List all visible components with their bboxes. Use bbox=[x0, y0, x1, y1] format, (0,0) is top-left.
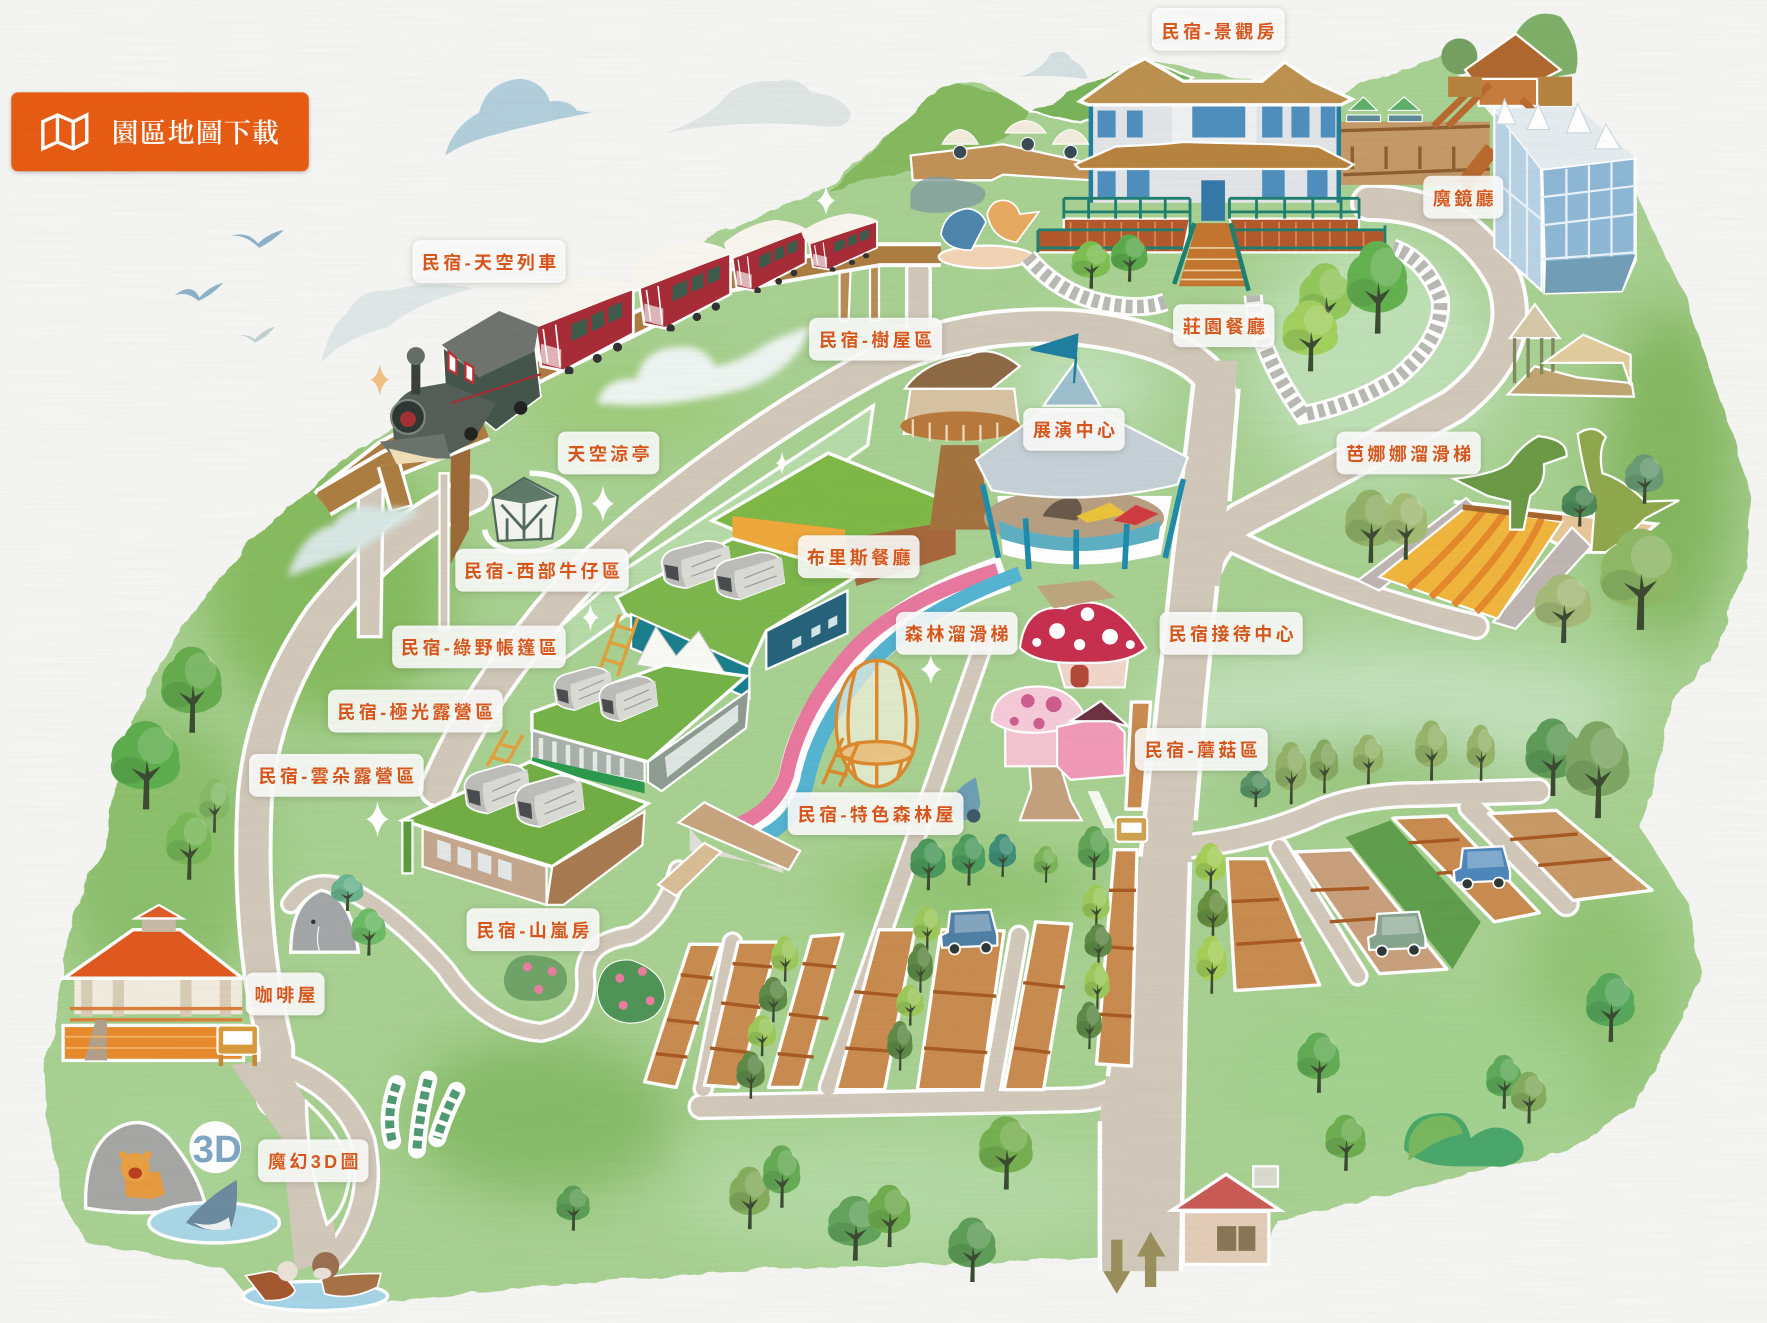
deck planks bbox=[1038, 219, 1385, 252]
label: 民宿-蘑菇區: 民宿-蘑菇區 bbox=[1145, 740, 1261, 761]
label: 咖啡屋: 咖啡屋 bbox=[255, 985, 319, 1005]
label: 民宿-西部牛仔區: 民宿-西部牛仔區 bbox=[464, 561, 623, 582]
label: 民宿-綠野帳篷區: 民宿-綠野帳篷區 bbox=[401, 637, 560, 658]
label: 民宿-樹屋區: 民宿-樹屋區 bbox=[819, 330, 935, 351]
sky pavilion bbox=[485, 473, 579, 552]
label: 民宿接待中心: 民宿接待中心 bbox=[1169, 624, 1297, 645]
label: 民宿-景觀房: 民宿-景觀房 bbox=[1162, 21, 1278, 42]
clouds in sky bbox=[321, 52, 1087, 363]
label: 咖啡屋 bbox=[246, 973, 325, 1015]
label: 森林溜滑梯 bbox=[896, 612, 1018, 655]
tiger bbox=[119, 1151, 165, 1199]
exhibition center bbox=[976, 335, 1188, 569]
bus stop sign bbox=[217, 1025, 258, 1055]
rose bushes bbox=[504, 955, 665, 1023]
label: 民宿-特色森林屋: 民宿-特色森林屋 bbox=[798, 804, 957, 825]
rock bushes bbox=[911, 177, 985, 213]
tent stage pavilion bbox=[1508, 304, 1634, 397]
label: 民宿-景觀房 bbox=[1152, 8, 1285, 51]
grass sliver in loop bbox=[307, 1102, 349, 1224]
scattered trees lower bbox=[556, 973, 1635, 1282]
gatehouse bbox=[1172, 1166, 1280, 1264]
pale road strip bbox=[530, 406, 873, 659]
main villa bbox=[911, 59, 1490, 291]
building: aurora camp bbox=[487, 665, 749, 793]
tents bbox=[637, 627, 727, 685]
farm fields right bbox=[1227, 810, 1652, 991]
farm vans bbox=[941, 846, 1510, 957]
rail-car cabins on rooftops bbox=[464, 541, 784, 827]
label: 民宿-雲朵露營區: 民宿-雲朵露營區 bbox=[258, 766, 418, 787]
label: 森林溜滑梯: 森林溜滑梯 bbox=[905, 625, 1012, 645]
label: 民宿-極光露營區: 民宿-極光露營區 bbox=[337, 701, 497, 722]
label: 民宿-天空列車: 民宿-天空列車 bbox=[422, 252, 560, 273]
railway bridge and pillars bbox=[321, 255, 941, 637]
label: 民宿-西部牛仔區 bbox=[455, 549, 629, 592]
train: locomotive bbox=[380, 311, 541, 464]
label: 民宿-天空列車 bbox=[412, 240, 566, 283]
treehouse area building bbox=[900, 351, 1020, 530]
climbing dome bbox=[823, 660, 917, 787]
main road white edges bbox=[1100, 383, 1238, 1271]
red mushroom reception bbox=[1020, 580, 1146, 687]
label: 魔鏡廳 bbox=[1423, 176, 1503, 219]
wooden terrace right behind bbox=[1341, 122, 1490, 185]
farm field furrows left bbox=[656, 890, 1136, 1057]
teal railings bbox=[1038, 198, 1385, 252]
label: 魔幻3D圖 bbox=[258, 1139, 369, 1182]
mandarin ducks bbox=[243, 1252, 388, 1311]
low clouds on map bbox=[287, 327, 811, 577]
label: 民宿-樹屋區 bbox=[809, 318, 942, 361]
download button bbox=[11, 92, 309, 171]
flying birds bbox=[175, 230, 284, 343]
building: Bliss restaurant bbox=[712, 453, 967, 586]
label: 魔幻3D圖: 魔幻3D圖 bbox=[268, 1151, 362, 1172]
label: 芭娜娜溜滑梯: 芭娜娜溜滑梯 bbox=[1346, 444, 1475, 464]
label: 天空涼亭: 天空涼亭 bbox=[567, 443, 653, 464]
main entry road bbox=[1100, 361, 1237, 1271]
label: 布里斯餐廳 bbox=[798, 535, 920, 578]
mirror glass hall bbox=[1494, 99, 1635, 293]
scooter bbox=[949, 778, 980, 823]
patio umbrellas bbox=[942, 97, 1422, 159]
label: 民宿-山嵐房: 民宿-山嵐房 bbox=[477, 920, 593, 941]
building: cloud camp bbox=[402, 762, 648, 905]
building: green tent camp bbox=[600, 539, 859, 699]
blue flag bbox=[1031, 335, 1077, 383]
label: 芭娜娜溜滑梯 bbox=[1337, 432, 1481, 474]
watercolor tone blobs bbox=[56, 237, 1735, 1251]
forest slide bbox=[738, 570, 1020, 836]
scattered trees left bbox=[111, 647, 229, 880]
roads bbox=[231, 203, 1566, 1271]
leafy plant bbox=[390, 1080, 456, 1149]
icon: 3D bubble: 3D bbox=[193, 1128, 242, 1171]
label: 展演中心 bbox=[1023, 408, 1125, 451]
entry arrows bbox=[1103, 1232, 1165, 1294]
icon: orange sparkle bbox=[371, 364, 389, 396]
garden fences bbox=[1028, 248, 1441, 415]
wooden shelter and stairs bbox=[658, 802, 800, 896]
fish in pond bbox=[149, 1180, 279, 1243]
elephant rock and tree bbox=[291, 874, 386, 956]
pink mushroom house bbox=[992, 686, 1129, 828]
wooden ladder bbox=[600, 614, 638, 676]
trees around slide bbox=[1345, 454, 1679, 643]
front stairs bbox=[1179, 223, 1246, 286]
label: 民宿-特色森林屋 bbox=[788, 792, 964, 835]
café gazebo bbox=[63, 905, 258, 1066]
banana slide bbox=[1358, 498, 1657, 629]
dinosaurs bbox=[1454, 429, 1679, 552]
treehouse on top right bbox=[1433, 14, 1577, 186]
farm fields left bbox=[645, 702, 1151, 1090]
label: 布里斯餐廳: 布里斯餐廳 bbox=[807, 547, 914, 568]
label: 民宿-雲朵露營區 bbox=[249, 754, 424, 797]
hills behind house bbox=[828, 85, 1031, 192]
tent spire bbox=[1044, 362, 1100, 406]
label: 民宿接待中心 bbox=[1160, 612, 1303, 655]
wooden terrace left bbox=[911, 144, 1093, 180]
lower left wide road bbox=[231, 1059, 338, 1271]
label: 莊園餐廳: 莊園餐廳 bbox=[1183, 316, 1268, 337]
white sparkles bbox=[366, 186, 941, 837]
label: 展演中心: 展演中心 bbox=[1033, 421, 1118, 441]
label: 民宿-山嵐房 bbox=[467, 908, 600, 951]
two birds bbox=[939, 200, 1039, 268]
farm tree rows bbox=[736, 719, 1629, 1099]
tiger rock bbox=[86, 1123, 205, 1213]
train: carriages bbox=[524, 213, 879, 375]
bushes lower right bbox=[1404, 1113, 1524, 1166]
label: 民宿-蘑菇區 bbox=[1135, 728, 1268, 771]
garden trees bbox=[1072, 234, 1408, 371]
button text: 園區地圖下載 bbox=[112, 119, 280, 149]
bus stop sign upper bbox=[1116, 817, 1147, 842]
label: 莊園餐廳 bbox=[1173, 304, 1275, 347]
icon: open map bbox=[43, 115, 87, 149]
label: 民宿-極光露營區 bbox=[328, 690, 503, 732]
label: 魔鏡廳: 魔鏡廳 bbox=[1433, 188, 1497, 209]
label: 天空涼亭 bbox=[558, 432, 659, 474]
label: 民宿-綠野帳篷區 bbox=[392, 625, 566, 668]
